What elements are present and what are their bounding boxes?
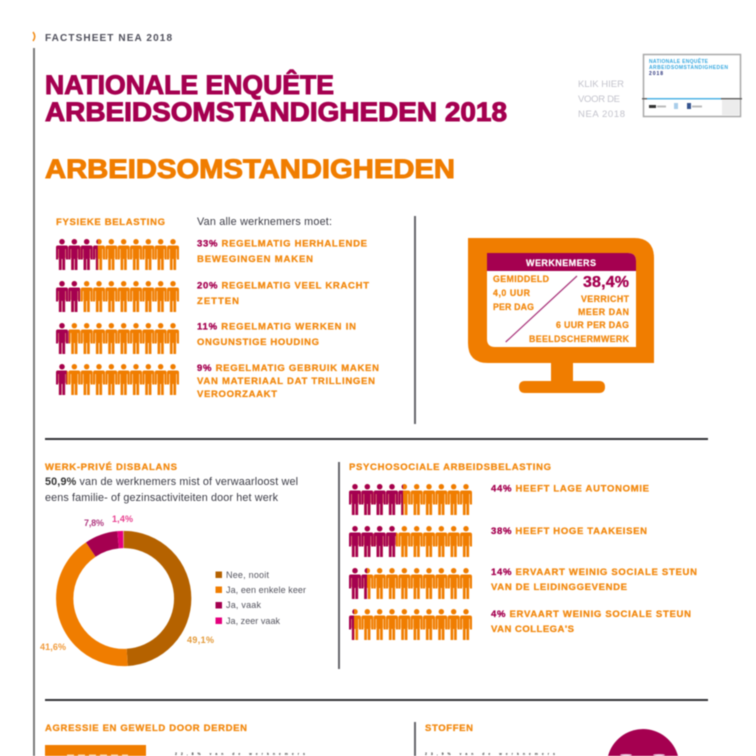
donut value labels: 49,1% bbox=[187, 635, 214, 645]
diagonal divider bbox=[506, 276, 577, 342]
screen header: WERKNEMERS bbox=[526, 258, 596, 268]
right statistic: 38,4% bbox=[583, 274, 629, 291]
panel: psychosociale arbeidsbelasting bbox=[349, 462, 697, 640]
text 20% bbox=[197, 280, 369, 307]
left statistic: PER DAG bbox=[493, 302, 534, 312]
heading: fysieke belasting: FYSIEKE BELASTING bbox=[56, 217, 165, 228]
screen header bbox=[487, 253, 636, 271]
link text: KLIK HIER bbox=[578, 79, 624, 90]
intro paragraph bbox=[45, 476, 298, 504]
right statistic: BEELDSCHERMWERK bbox=[529, 334, 630, 344]
orange box bbox=[45, 745, 146, 756]
legend: Nee, nooit bbox=[226, 570, 269, 580]
right statistic: 6 UUR PER DAG bbox=[556, 320, 629, 330]
left statistic: GEMIDDELD bbox=[493, 274, 549, 284]
text 11% bbox=[197, 322, 356, 348]
text 9%: VAN MATERIAAL DAT TRILLINGEN bbox=[197, 376, 375, 387]
section heading: ARBEIDSOMSTANDIGHEDEN bbox=[45, 154, 455, 184]
report cover thumbnail bbox=[642, 54, 742, 116]
text 11%: 11% REGELMATIG WERKEN IN bbox=[197, 322, 356, 332]
text 44%: 44% HEEFT LAGE AUTONOMIE bbox=[491, 484, 649, 494]
text 14%: 14% ERVAART WEINIG SOCIALE STEUN bbox=[491, 567, 697, 578]
text 14%: VAN DE LEIDINGGEVENDE bbox=[491, 582, 627, 593]
link text: VOOR DE bbox=[578, 94, 620, 105]
text 33%: 33% REGELMATIG HERHALENDE bbox=[197, 238, 367, 250]
heading: agressie: AGRESSIE EN GEWELD DOOR DERDEN bbox=[45, 723, 247, 734]
heading: stoffen: STOFFEN bbox=[425, 723, 473, 734]
intro paragraph: eens familie- of gezinsactiviteiten door het werk bbox=[45, 492, 279, 504]
text 9%: 9% REGELMATIG GEBRUIK MAKEN bbox=[197, 363, 379, 374]
panel: fysieke belasting bbox=[56, 216, 379, 400]
text 4% bbox=[491, 609, 691, 635]
donut value labels: 7,8% bbox=[84, 518, 104, 528]
header label: FACTSHEET NEA 2018 bbox=[45, 33, 172, 44]
donut value labels bbox=[40, 514, 214, 652]
text 38%: 38% HEEFT HOGE TAAKEISEN bbox=[491, 526, 647, 537]
title: NATIONALE ENQUÊTE bbox=[45, 70, 334, 100]
text 20%: 20% REGELMATIG VEEL KRACHT bbox=[197, 280, 369, 292]
legend: Ja, een enkele keer bbox=[226, 585, 306, 595]
text 9%: VEROORZAAKT bbox=[197, 389, 277, 400]
legend: Ja, vaak bbox=[226, 600, 262, 610]
donut value labels: 41,6% bbox=[40, 642, 66, 652]
right statistic: MEER DAN bbox=[578, 307, 629, 317]
cropped statistic text: 22,8% van de werknemers bbox=[175, 752, 305, 756]
cropped statistic text: 23,9% van de werknemers bbox=[425, 752, 555, 756]
link text bbox=[578, 79, 625, 120]
text 33% bbox=[197, 238, 367, 265]
donut value labels: 1,4% bbox=[112, 514, 133, 524]
link text: NEA 2018 bbox=[578, 109, 625, 120]
panel: stoffen bbox=[425, 723, 678, 756]
icon: purple circle bbox=[608, 729, 678, 756]
pictogram row 11% bbox=[56, 323, 179, 354]
report cover thumbnail: ARBEIDSOMSTANDIGHEDEN bbox=[649, 65, 728, 71]
monitor screen bbox=[487, 253, 636, 347]
title bbox=[45, 70, 507, 127]
text 4%: VAN COLLEGA'S bbox=[491, 624, 574, 635]
pictogram row 9% bbox=[56, 364, 179, 395]
intro paragraph: 50,9% van de werknemers mist of verwaarloost wel bbox=[45, 476, 298, 488]
pictogram row 44% bbox=[349, 484, 472, 515]
title: ARBEIDSOMSTANDIGHEDEN 2018 bbox=[45, 97, 507, 127]
text 11%: ONGUNSTIGE HOUDING bbox=[197, 337, 319, 348]
legend: Ja, zeer vaak bbox=[226, 616, 280, 626]
heading: psychosociaal: PSYCHOSOCIALE ARBEIDSBELASTING bbox=[349, 462, 551, 473]
text 20%: ZETTEN bbox=[197, 296, 239, 307]
text 4%: 4% ERVAART WEINIG SOCIALE STEUN bbox=[491, 609, 691, 620]
right statistic: VERRICHT bbox=[581, 294, 630, 304]
panel: beeldschermwerk monitor bbox=[468, 238, 654, 393]
icon: monitor frame bbox=[468, 238, 654, 363]
legend bbox=[216, 570, 306, 626]
intro text: Van alle werknemers moet: bbox=[197, 216, 332, 228]
heading: werk-prive: WERK-PRIVÉ DISBALANS bbox=[45, 462, 177, 473]
pictogram row 33% bbox=[56, 239, 179, 270]
right statistic bbox=[529, 274, 630, 344]
panel: agressie en geweld bbox=[45, 723, 305, 756]
donut chart bbox=[65, 540, 183, 658]
report cover thumbnail: NATIONALE ENQUÊTE bbox=[649, 57, 709, 65]
report cover thumbnail: 2018 bbox=[649, 71, 663, 77]
text 9% bbox=[197, 363, 379, 400]
left statistic: 4,0 UUR bbox=[493, 288, 531, 298]
panel: werk-prive disbalans bbox=[40, 462, 306, 658]
left page rule bbox=[33, 48, 35, 756]
text 14% bbox=[491, 567, 697, 593]
text 33%: BEWEGINGEN MAKEN bbox=[197, 254, 313, 265]
pictogram row 14% bbox=[349, 568, 472, 599]
pictogram row 20% bbox=[56, 281, 179, 312]
pictogram row 38% bbox=[349, 526, 472, 557]
icon: monitor stand bbox=[519, 363, 605, 393]
pictogram row 4% bbox=[349, 609, 472, 640]
left statistic bbox=[493, 274, 549, 312]
